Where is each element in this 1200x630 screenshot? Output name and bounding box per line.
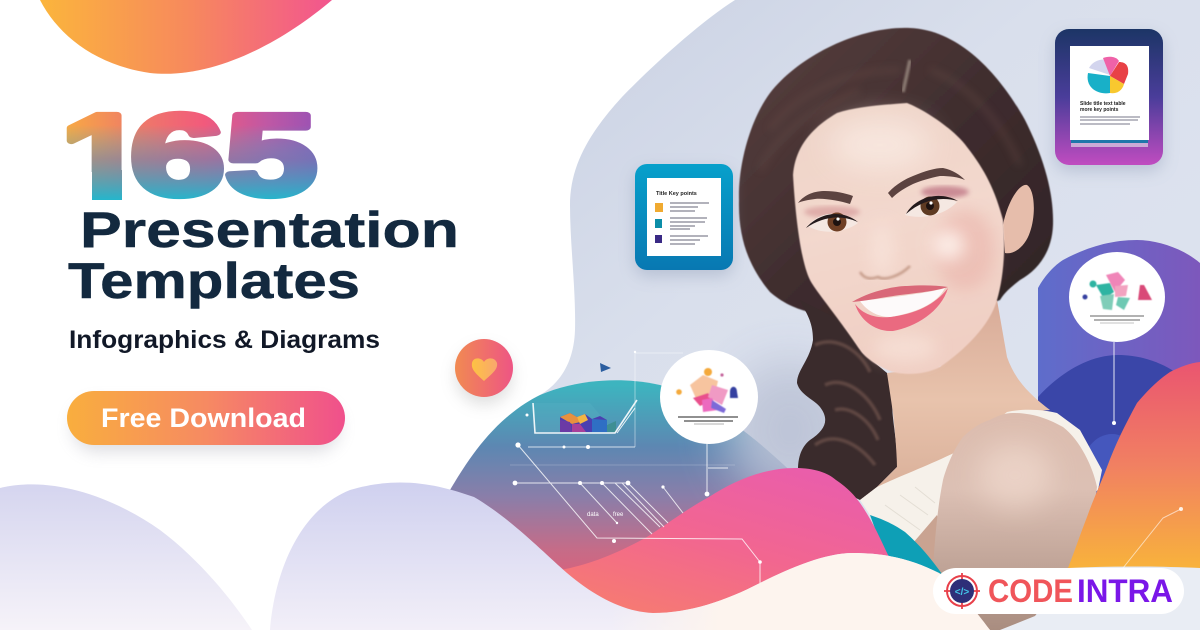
logo: Codeintra: CODE [988,573,1073,609]
skin under arm [913,515,950,570]
hair [739,28,1053,340]
neck [860,300,1050,500]
subheading: Infographics & Diagrams [69,326,380,354]
hair strands [760,70,1020,170]
dress [860,410,1102,560]
card: navy-purple document [1055,29,1163,171]
decorative blob: top orange-pink [40,0,332,74]
nose [860,266,910,278]
title: 165 [66,110,318,200]
bottom-left lavender wave [0,484,252,630]
icon: heart badge [455,339,513,404]
teal accent [870,515,942,574]
heading: Presentation Templates: Presentation [80,202,459,258]
heading: Presentation Templates [68,202,459,309]
bottom-centre lavender wave [270,482,990,630]
bottom-right pale strip [1000,567,1200,630]
white circle bubble with flower (right) [1069,252,1165,425]
card: navy-purple document: Slide title text table [1080,101,1126,107]
card: blue document [635,164,733,276]
face [793,103,1004,374]
chart blob with area chart [450,353,855,630]
white circle bubble with flower (centre) [660,350,758,444]
icon: small arrow pointer [600,363,611,372]
pink wave [560,468,950,630]
circuit lines: data [587,512,599,518]
card: blue document: Title Key points [656,191,697,197]
logo icon: </> [955,587,969,598]
braid [797,300,897,500]
logo: Codeintra [933,568,1184,614]
button: Free Download: Free Download [101,403,306,433]
circuit lines [513,351,762,585]
panel: purple arch with dark blue dome [1038,240,1200,506]
orange-pink wave right [1068,362,1200,568]
background blob: blue-grey panel [440,0,1200,630]
peach wave [600,553,990,630]
area chart [528,353,683,447]
button: Free Download [67,391,345,452]
pie icon [1088,57,1128,93]
circuit lines: free [613,512,624,518]
eyebrows [798,168,965,204]
logo: Codeintra: INTRA [1077,573,1173,609]
logo icon [944,573,980,609]
shoulder [933,413,1097,630]
eyes [804,186,969,232]
ear [1003,185,1034,253]
lips and smile [852,285,948,331]
thin line on orange wave [1123,507,1183,568]
portrait: woman [739,28,1102,630]
heading: Presentation Templates: Templates [68,253,360,309]
card: navy-purple document: more key points [1080,107,1119,113]
